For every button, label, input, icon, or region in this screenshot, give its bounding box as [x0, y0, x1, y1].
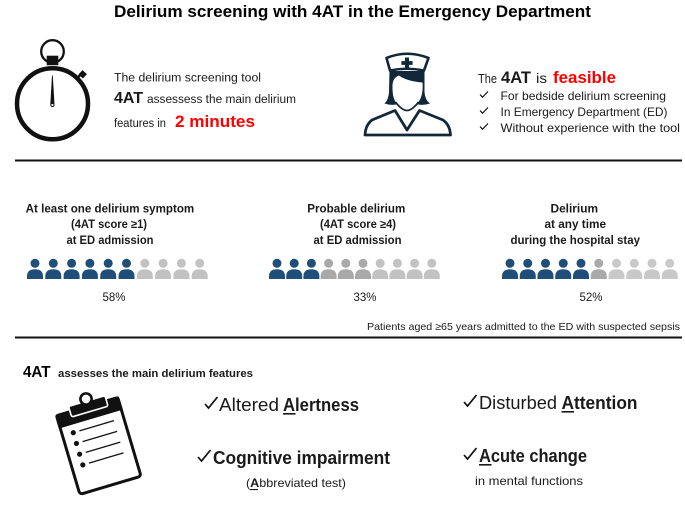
pictogram: 6 of 10 people	[27, 259, 208, 279]
feature: altered alertness: Altered	[219, 394, 279, 415]
heading: delirium at any time	[510, 204, 641, 247]
heading: 4AT main features	[23, 364, 253, 381]
feature: cognitive impairment: (Abbreviated test)	[246, 476, 346, 490]
text block: 4AT assesses delirium in 2 minutes: 2 minutes	[175, 112, 255, 131]
pictogram: 3 of 10 people	[269, 259, 440, 279]
hair	[384, 71, 430, 105]
feature: disturbed attention: Attention	[562, 392, 638, 413]
text block: 4AT is feasible: 4AT	[501, 68, 532, 87]
icon: stopwatch	[17, 40, 88, 139]
text block: 4AT is feasible: feasible	[553, 68, 616, 87]
panel: delirium during stay	[502, 204, 678, 304]
heading: probable delirium: at ED admission	[314, 235, 402, 247]
feature: acute change	[464, 445, 587, 488]
panel: probable delirium	[269, 204, 440, 304]
feature: cognitive impairment	[198, 447, 390, 490]
face	[392, 76, 423, 110]
pictogram: 5 of 10 people	[502, 259, 678, 279]
feature: disturbed attention: Disturbed	[479, 392, 557, 413]
feature: altered alertness	[205, 394, 359, 415]
cap	[386, 54, 428, 70]
text block: 4AT is feasible: The	[478, 72, 497, 86]
heading: at least one symptom	[26, 204, 194, 247]
title: Delirium screening with 4AT in the Emergency Department	[114, 3, 592, 21]
text block: 4AT assesses delirium in 2 minutes	[114, 72, 296, 131]
value: 58%: 58%	[102, 290, 126, 304]
text block: 4AT assesses delirium in 2 minutes: 4AT	[114, 90, 144, 107]
heading: probable delirium	[307, 204, 405, 247]
feature: altered alertness: Alertness	[283, 394, 359, 415]
heading: 4AT main features: 4AT	[23, 364, 51, 381]
heading: probable delirium: (4AT score ≥4)	[320, 219, 396, 231]
feature: disturbed attention	[464, 392, 638, 413]
icon: nurse	[365, 54, 450, 135]
heading: probable delirium: Probable delirium	[307, 204, 405, 216]
checklist: feasibility points: In Emergency Department (ED)	[500, 105, 668, 119]
shoulders and collar	[365, 110, 450, 135]
checklist: feasibility points	[480, 89, 680, 135]
heading: at least one symptom: At least one delirium symptom	[26, 204, 194, 216]
feature: acute change: in mental functions	[475, 474, 583, 488]
feature: cognitive impairment: Cognitive impairment	[213, 447, 390, 468]
heading: 4AT main features: assesses the main delirium features	[58, 368, 253, 380]
checklist: feasibility points: Without experience with the tool	[500, 121, 680, 135]
text block: 4AT assesses delirium in 2 minutes: assessess the main delirium	[147, 94, 296, 106]
text block: 4AT is feasible	[478, 68, 616, 87]
text block: 4AT is feasible: is	[536, 70, 547, 86]
note: patient population: Patients aged ≥65 years admitted to the ED with suspected sepsis	[367, 321, 680, 333]
value: 33%: 33%	[354, 290, 377, 304]
text block: 4AT assesses delirium in 2 minutes: The delirium screening tool	[114, 72, 261, 84]
heading: delirium at any time: Delirium	[550, 204, 598, 216]
text block: 4AT assesses delirium in 2 minutes: features in	[114, 118, 166, 130]
panel: at least one delirium symptom	[26, 204, 208, 304]
feature: acute change: Acute change	[479, 445, 587, 466]
heading: at least one symptom: (4AT score ≥1)	[71, 219, 147, 231]
value: 52%: 52%	[580, 290, 603, 304]
heading: at least one symptom: at ED admission	[66, 235, 154, 247]
icon: clipboard	[51, 384, 142, 495]
checklist: feasibility points: For bedside delirium screening	[500, 89, 666, 103]
heading: delirium at any time: at any time	[544, 219, 606, 231]
heading: delirium at any time: during the hospital stay	[510, 235, 641, 247]
